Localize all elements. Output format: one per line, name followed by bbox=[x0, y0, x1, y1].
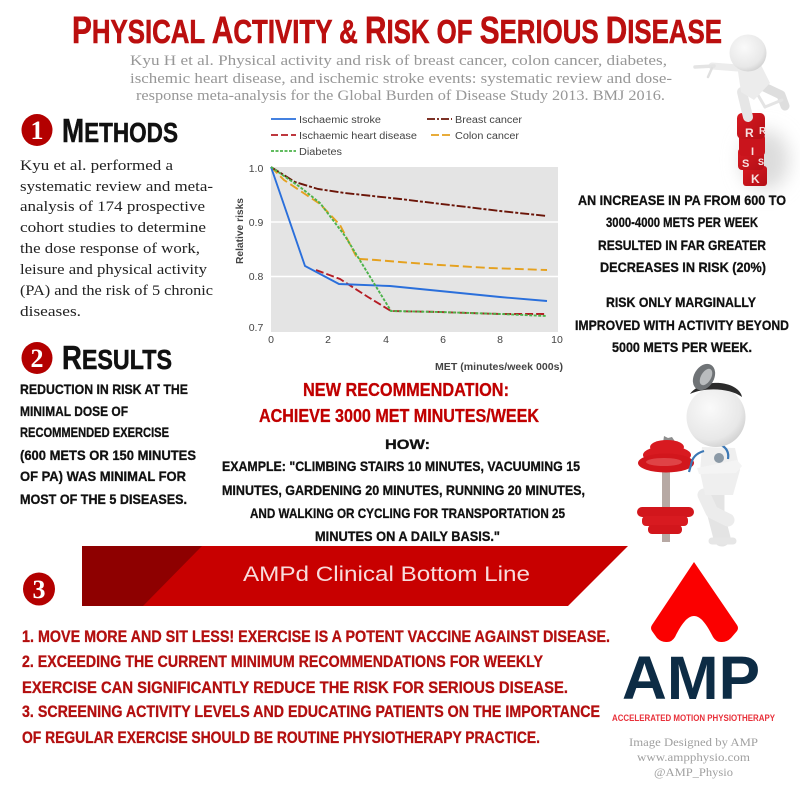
axis labels: 6 bbox=[440, 334, 446, 346]
new recommendation heading: NEW RECOMMENDATION: bbox=[303, 380, 509, 400]
axis labels: 10 bbox=[551, 334, 563, 346]
results text block: REDUCTION IN RISK AT THE bbox=[20, 381, 188, 397]
heading: results: RESULTS bbox=[62, 339, 172, 376]
axis labels bbox=[235, 163, 563, 373]
title: PHYSICAL ACTIVITY & RISK OF SERIOUS DISEASE bbox=[72, 10, 722, 52]
figure limbs bbox=[695, 66, 785, 117]
methods text block: cohort studies to determine bbox=[20, 220, 206, 236]
chart legend: Ischaemic heart disease bbox=[299, 131, 417, 142]
bottom line takeaways text block: 3. SCREENING ACTIVITY LEVELS AND EDUCATING PATIENTS ON THE IMPORTANCE bbox=[22, 703, 600, 721]
how-to example text block: MINUTES ON A DAILY BASIS." bbox=[315, 528, 500, 544]
methods text block: leisure and physical activity bbox=[20, 262, 208, 278]
methods text block bbox=[20, 158, 213, 320]
risk blocks: S bbox=[742, 158, 749, 170]
credits text block: @AMP_Physio bbox=[654, 767, 733, 779]
methods text block: diseases. bbox=[20, 304, 81, 320]
axis labels: MET (minutes/week 000s) bbox=[435, 362, 563, 373]
how-to example text block: AND WALKING OR CYCLING FOR TRANSPORTATION 25 bbox=[250, 505, 565, 521]
results text block: (600 METS OR 150 MINUTES bbox=[20, 447, 196, 463]
icon: doctor figure with dumbbell bbox=[637, 360, 746, 542]
methods text block: analysis of 174 prospective bbox=[20, 199, 205, 215]
axis labels: 0.9 bbox=[249, 217, 263, 229]
bottom line takeaways text block bbox=[22, 628, 610, 747]
axis labels: Relative risks bbox=[235, 198, 246, 264]
key finding text block: 3000-4000 METS PER WEEK bbox=[606, 214, 758, 230]
how-to example text block bbox=[222, 436, 585, 544]
methods text block: Kyu et al. performed a bbox=[20, 158, 173, 174]
banner: AMPd clinical bottom line bbox=[82, 546, 628, 606]
bottom line takeaways text block: OF REGULAR EXERCISE SHOULD BE ROUTINE PHYSIOTHERAPY PRACTICE. bbox=[22, 729, 540, 747]
citation text block: response meta-analysis for the Global Burden of Disease Study 2013. BMJ 2016. bbox=[136, 88, 665, 104]
methods text block: (PA) and the risk of 5 chronic bbox=[20, 283, 213, 299]
axis labels: 2 bbox=[325, 334, 331, 346]
credits text block: Image Designed by AMP bbox=[629, 737, 758, 749]
axis labels: 8 bbox=[497, 334, 503, 346]
icon: risk figure balancing on blocks bbox=[695, 34, 789, 190]
axis labels: 0.8 bbox=[249, 271, 263, 283]
key finding text block: RISK ONLY MARGINALLY bbox=[606, 294, 757, 310]
chart legend: Colon cancer bbox=[455, 131, 520, 142]
bottom line takeaways text block: 2. EXCEEDING THE CURRENT MINIMUM RECOMMENDATIONS FOR WEEKLY bbox=[22, 653, 543, 671]
risk blocks: R bbox=[745, 126, 754, 140]
banner: AMPd clinical bottom line: AMPd Clinical Bottom Line bbox=[243, 563, 530, 586]
risk blocks: K bbox=[751, 172, 760, 186]
series lines bbox=[271, 167, 547, 316]
methods text block: systematic review and meta- bbox=[20, 179, 213, 195]
AMP logo bbox=[612, 562, 776, 724]
risk blocks: I bbox=[751, 146, 754, 158]
results text block: OF PA) WAS MINIMAL FOR bbox=[20, 468, 186, 484]
numbered badge 1: 1 bbox=[30, 116, 44, 145]
key finding text block: DECREASES IN RISK (20%) bbox=[600, 259, 766, 275]
results text block: MOST OF THE 5 DISEASES. bbox=[20, 491, 187, 507]
bottom line takeaways text block: EXERCISE CAN SIGNIFICANTLY REDUCE THE RISK FOR SERIOUS DISEASE. bbox=[22, 679, 568, 697]
axis labels: 1.0 bbox=[249, 163, 263, 175]
numbered badge 3 bbox=[23, 572, 55, 606]
chart legend: Breast cancer bbox=[455, 115, 523, 126]
risk blocks: R bbox=[759, 126, 767, 137]
new recommendation heading bbox=[259, 380, 539, 426]
risk blocks bbox=[737, 113, 767, 186]
how-to example text block: HOW: bbox=[385, 436, 430, 452]
key finding text block bbox=[575, 192, 789, 355]
results text block: RECOMMENDED EXERCISE bbox=[20, 424, 169, 440]
methods text block: the dose response of work, bbox=[20, 241, 200, 257]
heading: methods: METHODS bbox=[62, 112, 178, 149]
results text block: MINIMAL DOSE OF bbox=[20, 403, 128, 419]
line chart: relative risk by MET bbox=[235, 115, 563, 373]
numbered badge 2 bbox=[22, 342, 52, 374]
AMP logo: AMP bbox=[622, 644, 760, 712]
numbered badge 3: 3 bbox=[32, 575, 46, 604]
stethoscope bbox=[689, 445, 728, 472]
logo mark bbox=[651, 562, 738, 642]
chart legend: Ischaemic stroke bbox=[299, 115, 381, 126]
body and legs bbox=[704, 490, 733, 541]
axis labels: 0 bbox=[268, 334, 274, 346]
numbered badge 2: 2 bbox=[30, 344, 44, 373]
numbered badge 1 bbox=[22, 114, 52, 146]
citation text block bbox=[130, 53, 672, 104]
how-to example text block: MINUTES, GARDENING 20 MINUTES, RUNNING 20 MINUTES, bbox=[222, 482, 585, 498]
key finding text block: 5000 METS PER WEEK. bbox=[612, 339, 752, 355]
head bbox=[686, 387, 746, 447]
key finding text block: RESULTED IN FAR GREATER bbox=[598, 237, 766, 253]
credits text block bbox=[629, 737, 758, 779]
chart legend: Diabetes bbox=[299, 147, 342, 158]
new recommendation heading: ACHIEVE 3000 MET MINUTES/WEEK bbox=[259, 406, 539, 426]
axis labels: 0.7 bbox=[249, 322, 263, 334]
results text block bbox=[20, 381, 196, 507]
risk blocks: S bbox=[758, 157, 764, 167]
citation text block: ischemic heart disease, and ischemic stroke events: systematic review and dose- bbox=[130, 71, 672, 87]
plot area bbox=[271, 167, 558, 332]
bottom line takeaways text block: 1. MOVE MORE AND SIT LESS! EXERCISE IS A POTENT VACCINE AGAINST DISEASE. bbox=[22, 628, 610, 646]
citation text block: Kyu H et al. Physical activity and risk of breast cancer, colon cancer, diabetes, bbox=[130, 53, 667, 69]
how-to example text block: EXAMPLE: "CLIMBING STAIRS 10 MINUTES, VACUUMING 15 bbox=[222, 458, 580, 474]
dumbbell bbox=[637, 436, 694, 542]
head mirror bbox=[690, 383, 742, 397]
axis labels: 4 bbox=[383, 334, 389, 346]
credits text block: www.ampphysio.com bbox=[637, 752, 750, 764]
chart legend bbox=[271, 115, 523, 158]
